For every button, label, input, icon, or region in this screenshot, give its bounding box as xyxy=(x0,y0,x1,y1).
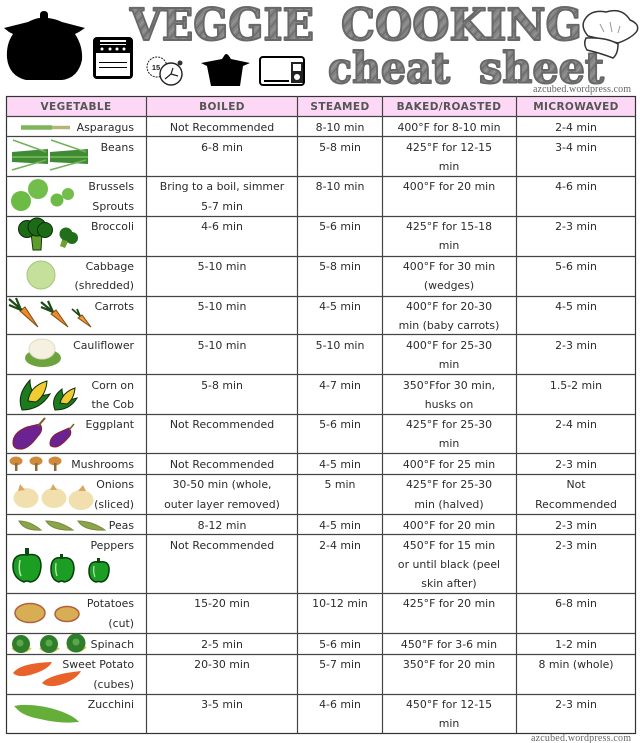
row: spinach xyxy=(12,634,597,653)
row: mushrooms: 400°F for 25 min xyxy=(403,458,495,471)
row: cauliflower: 400°F for 25-30 xyxy=(406,339,492,352)
row: cauliflower: 2-3 min xyxy=(555,339,597,352)
icon: small pot xyxy=(201,54,250,86)
row: mushrooms: Mushrooms xyxy=(71,458,134,471)
row: peppers: or until black (peel xyxy=(398,558,500,571)
row: asparagus: Asparagus xyxy=(77,121,134,134)
title line 2 xyxy=(328,44,604,94)
row: corn on the cob: husks on xyxy=(425,398,473,411)
row: eggplant: 2-4 min xyxy=(555,418,597,431)
row: onions: Recommended xyxy=(535,498,617,511)
icon: oven xyxy=(93,37,133,79)
row: sweet potato: 20-30 min xyxy=(194,658,250,671)
row: zucchini: 450°F for 12-15 xyxy=(406,698,492,711)
row: mushrooms xyxy=(10,456,597,471)
row: spinach: 2-5 min xyxy=(201,638,243,651)
row: brussels sprouts xyxy=(11,179,597,213)
row: peas: 8-12 min xyxy=(198,519,246,532)
row: broccoli: 4-6 min xyxy=(201,220,243,233)
row: corn on the cob: Corn on xyxy=(92,379,134,392)
row: mushrooms: Not Recommended xyxy=(170,458,274,471)
table header: VEGETABLE xyxy=(40,101,112,113)
row: onions: 425°F for 25-30 xyxy=(406,478,492,491)
row: cabbage: (wedges) xyxy=(424,279,474,292)
row: cabbage: 5-10 min xyxy=(198,260,246,273)
row: beans: min xyxy=(439,160,459,173)
row: asparagus: 8-10 min xyxy=(316,121,364,134)
row: peas: Peas xyxy=(109,519,134,532)
row: brussels sprouts: Sprouts xyxy=(92,200,134,213)
row: brussels sprouts: Brussels xyxy=(88,180,134,193)
icon: microwave xyxy=(260,57,304,85)
row: potatoes: 425°F for 20 min xyxy=(403,597,495,610)
table header: MICROWAVED xyxy=(533,101,619,113)
row: asparagus: Not Recommended xyxy=(170,121,274,134)
row: brussels sprouts: 400°F for 20 min xyxy=(403,180,495,193)
row: corn on the cob: the Cob xyxy=(91,398,134,411)
row: onions: (sliced) xyxy=(94,498,134,511)
row: spinach: 5-6 min xyxy=(319,638,361,651)
row: zucchini: 2-3 min xyxy=(555,698,597,711)
row: cabbage: (shredded) xyxy=(75,279,134,292)
row: cauliflower: min xyxy=(439,358,459,371)
row: cauliflower: 5-10 min xyxy=(316,339,364,352)
row: potatoes: 10-12 min xyxy=(312,597,368,610)
row: cauliflower: 5-10 min xyxy=(198,339,246,352)
row: eggplant: Eggplant xyxy=(86,418,135,431)
row: sweet potato xyxy=(13,658,614,691)
row: zucchini xyxy=(14,698,597,730)
row: peppers: skin after) xyxy=(421,577,477,590)
row: brussels sprouts: 4-6 min xyxy=(555,180,597,193)
row: zucchini: Zucchini xyxy=(88,698,134,711)
title line 1 xyxy=(129,0,582,51)
row: asparagus: 2-4 min xyxy=(555,121,597,134)
table header: BAKED/ROASTED xyxy=(397,101,501,113)
row: peppers: 2-4 min xyxy=(319,539,361,552)
row: peppers: 450°F for 15 min xyxy=(403,539,495,552)
row: sweet potato: 5-7 min xyxy=(319,658,361,671)
row: brussels sprouts: 8-10 min xyxy=(316,180,364,193)
row: peas xyxy=(19,519,597,532)
row: cabbage: Cabbage xyxy=(86,260,134,273)
row: corn on the cob: 5-8 min xyxy=(201,379,243,392)
title line 2: cheat xyxy=(328,44,450,94)
row: broccoli: 5-6 min xyxy=(319,220,361,233)
row: broccoli: min xyxy=(439,239,459,252)
row: mushrooms: 4-5 min xyxy=(319,458,361,471)
watermark top: azcubed.wordpress.com xyxy=(533,84,631,95)
row: brussels sprouts: Bring to a boil, simmer xyxy=(160,180,285,193)
row: onions: Onions xyxy=(96,478,134,491)
row: carrots: 4-5 min xyxy=(555,300,597,313)
row: corn on the cob: 4-7 min xyxy=(319,379,361,392)
row: potatoes: Potatoes xyxy=(87,597,134,610)
title line 2: sheet xyxy=(479,44,604,94)
icon: timer clock xyxy=(147,57,182,85)
row: beans: 5-8 min xyxy=(319,141,361,154)
title line 1: VEGGIE xyxy=(129,0,314,51)
row: cabbage: 400°F for 30 min xyxy=(403,260,495,273)
row: cauliflower: Cauliflower xyxy=(73,339,135,352)
row: cabbage xyxy=(27,260,597,292)
row: onions xyxy=(14,478,617,511)
row: sweet potato: 8 min (whole) xyxy=(538,658,614,671)
row: eggplant: min xyxy=(439,437,459,450)
row: carrots: 400°F for 20-30 xyxy=(406,300,492,313)
row: broccoli: Broccoli xyxy=(91,220,134,233)
icon: large pot xyxy=(4,11,85,80)
table header xyxy=(40,101,619,113)
row: beans: Beans xyxy=(101,141,134,154)
row: corn on the cob: 1.5-2 min xyxy=(550,379,602,392)
row: broccoli: 2-3 min xyxy=(555,220,597,233)
row: spinach: 1-2 min xyxy=(555,638,597,651)
row: asparagus: 400°F for 8-10 min xyxy=(397,121,501,134)
row: peas: 4-5 min xyxy=(319,519,361,532)
row: onions: 30-50 min (whole, xyxy=(172,478,272,491)
row: broccoli: 425°F for 15-18 xyxy=(406,220,492,233)
row: potatoes: 15-20 min xyxy=(194,597,250,610)
row: onions: Not xyxy=(566,478,586,491)
row: peas: 400°F for 20 min xyxy=(403,519,495,532)
row: onions: outer layer removed) xyxy=(164,498,280,511)
row: carrots xyxy=(9,298,597,332)
row: beans: 6-8 min xyxy=(201,141,243,154)
row: beans: 3-4 min xyxy=(555,141,597,154)
row: eggplant: Not Recommended xyxy=(170,418,274,431)
row: spinach: Spinach xyxy=(91,638,134,651)
row: potatoes: (cut) xyxy=(108,617,134,630)
row: peppers: Not Recommended xyxy=(170,539,274,552)
row: zucchini: 3-5 min xyxy=(201,698,243,711)
row: asparagus xyxy=(21,121,597,134)
table header: BOILED xyxy=(199,101,245,113)
row: eggplant: 425°F for 25-30 xyxy=(406,418,492,431)
row: corn on the cob: 350°Ffor 30 min, xyxy=(403,379,495,392)
row: cabbage: 5-6 min xyxy=(555,260,597,273)
row: mushrooms: 2-3 min xyxy=(555,458,597,471)
row: broccoli xyxy=(18,218,597,252)
row: cabbage: 5-8 min xyxy=(319,260,361,273)
row: beans: 425°F for 12-15 xyxy=(406,141,492,154)
icon: timer clock: 15 xyxy=(152,63,160,72)
row: carrots: 5-10 min xyxy=(198,300,246,313)
row: carrots: Carrots xyxy=(95,300,134,313)
row: zucchini: 4-6 min xyxy=(319,698,361,711)
row: brussels sprouts: 5-7 min xyxy=(201,200,243,213)
row: peppers: 2-3 min xyxy=(555,539,597,552)
row: peppers: Peppers xyxy=(90,539,134,552)
row: peppers xyxy=(13,539,597,590)
row: peas: 2-3 min xyxy=(555,519,597,532)
row: carrots: min (baby carrots) xyxy=(399,319,499,332)
row: potatoes: 6-8 min xyxy=(555,597,597,610)
row: carrots: 4-5 min xyxy=(319,300,361,313)
row: sweet potato: (cubes) xyxy=(93,678,134,691)
row: zucchini: min xyxy=(439,717,459,730)
row: potatoes xyxy=(15,597,597,630)
icon: chef hat xyxy=(583,11,638,58)
row: sweet potato: Sweet Potato xyxy=(62,658,134,671)
row: beans xyxy=(12,140,597,173)
row: corn on the cob xyxy=(20,379,602,411)
table header: STEAMED xyxy=(310,101,370,113)
row: spinach: 450°F for 3-6 min xyxy=(401,638,497,651)
row: eggplant xyxy=(13,418,597,450)
row: sweet potato: 350°F for 20 min xyxy=(403,658,495,671)
row: onions: 5 min xyxy=(325,478,355,491)
row: eggplant: 5-6 min xyxy=(319,418,361,431)
row: cauliflower xyxy=(25,339,597,371)
title line 1: COOKING xyxy=(341,0,582,51)
row: onions: min (halved) xyxy=(414,498,484,511)
